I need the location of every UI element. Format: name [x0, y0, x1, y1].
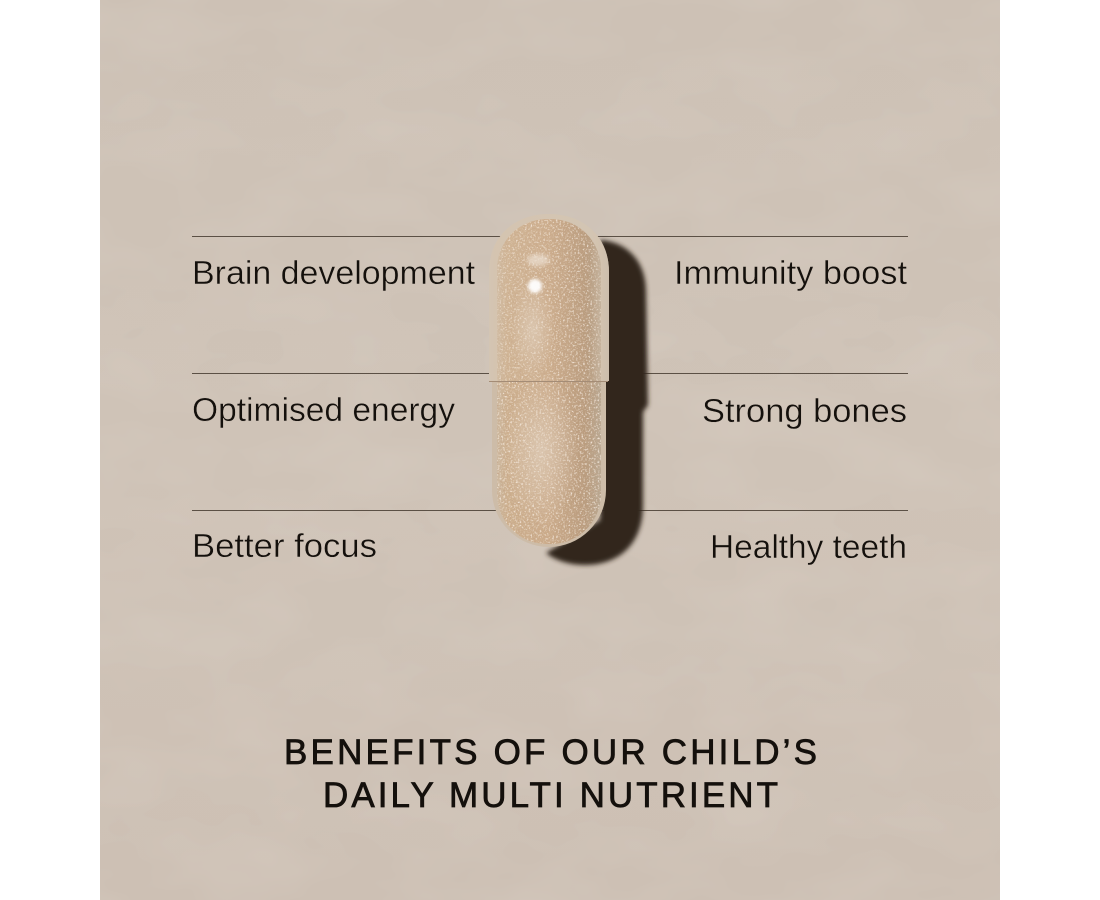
title: BENEFITS OF OUR CHILD’S — [284, 733, 817, 772]
capsule upper half — [489, 214, 609, 381]
capsule seam — [489, 380, 608, 382]
left divider lines — [192, 236, 505, 510]
label: brain development: Brain development — [192, 254, 475, 291]
capsule shell sheen — [489, 214, 609, 381]
label: healthy teeth: Healthy teeth — [710, 528, 907, 565]
title — [284, 733, 817, 815]
capsule upper glare — [527, 254, 549, 266]
capsule highlight — [528, 279, 542, 293]
capsule powder fill — [497, 219, 601, 544]
right divider lines — [590, 236, 908, 510]
label: strong bones: Strong bones — [702, 392, 907, 429]
label: optimised energy: Optimised energy — [192, 391, 456, 428]
label: immunity boost: Immunity boost — [674, 254, 907, 291]
title: DAILY MULTI NUTRIENT — [323, 776, 778, 815]
capsule — [489, 214, 609, 547]
capsule lower half — [492, 380, 606, 547]
label: better focus: Better focus — [192, 527, 377, 564]
capsule shadow — [546, 240, 648, 565]
